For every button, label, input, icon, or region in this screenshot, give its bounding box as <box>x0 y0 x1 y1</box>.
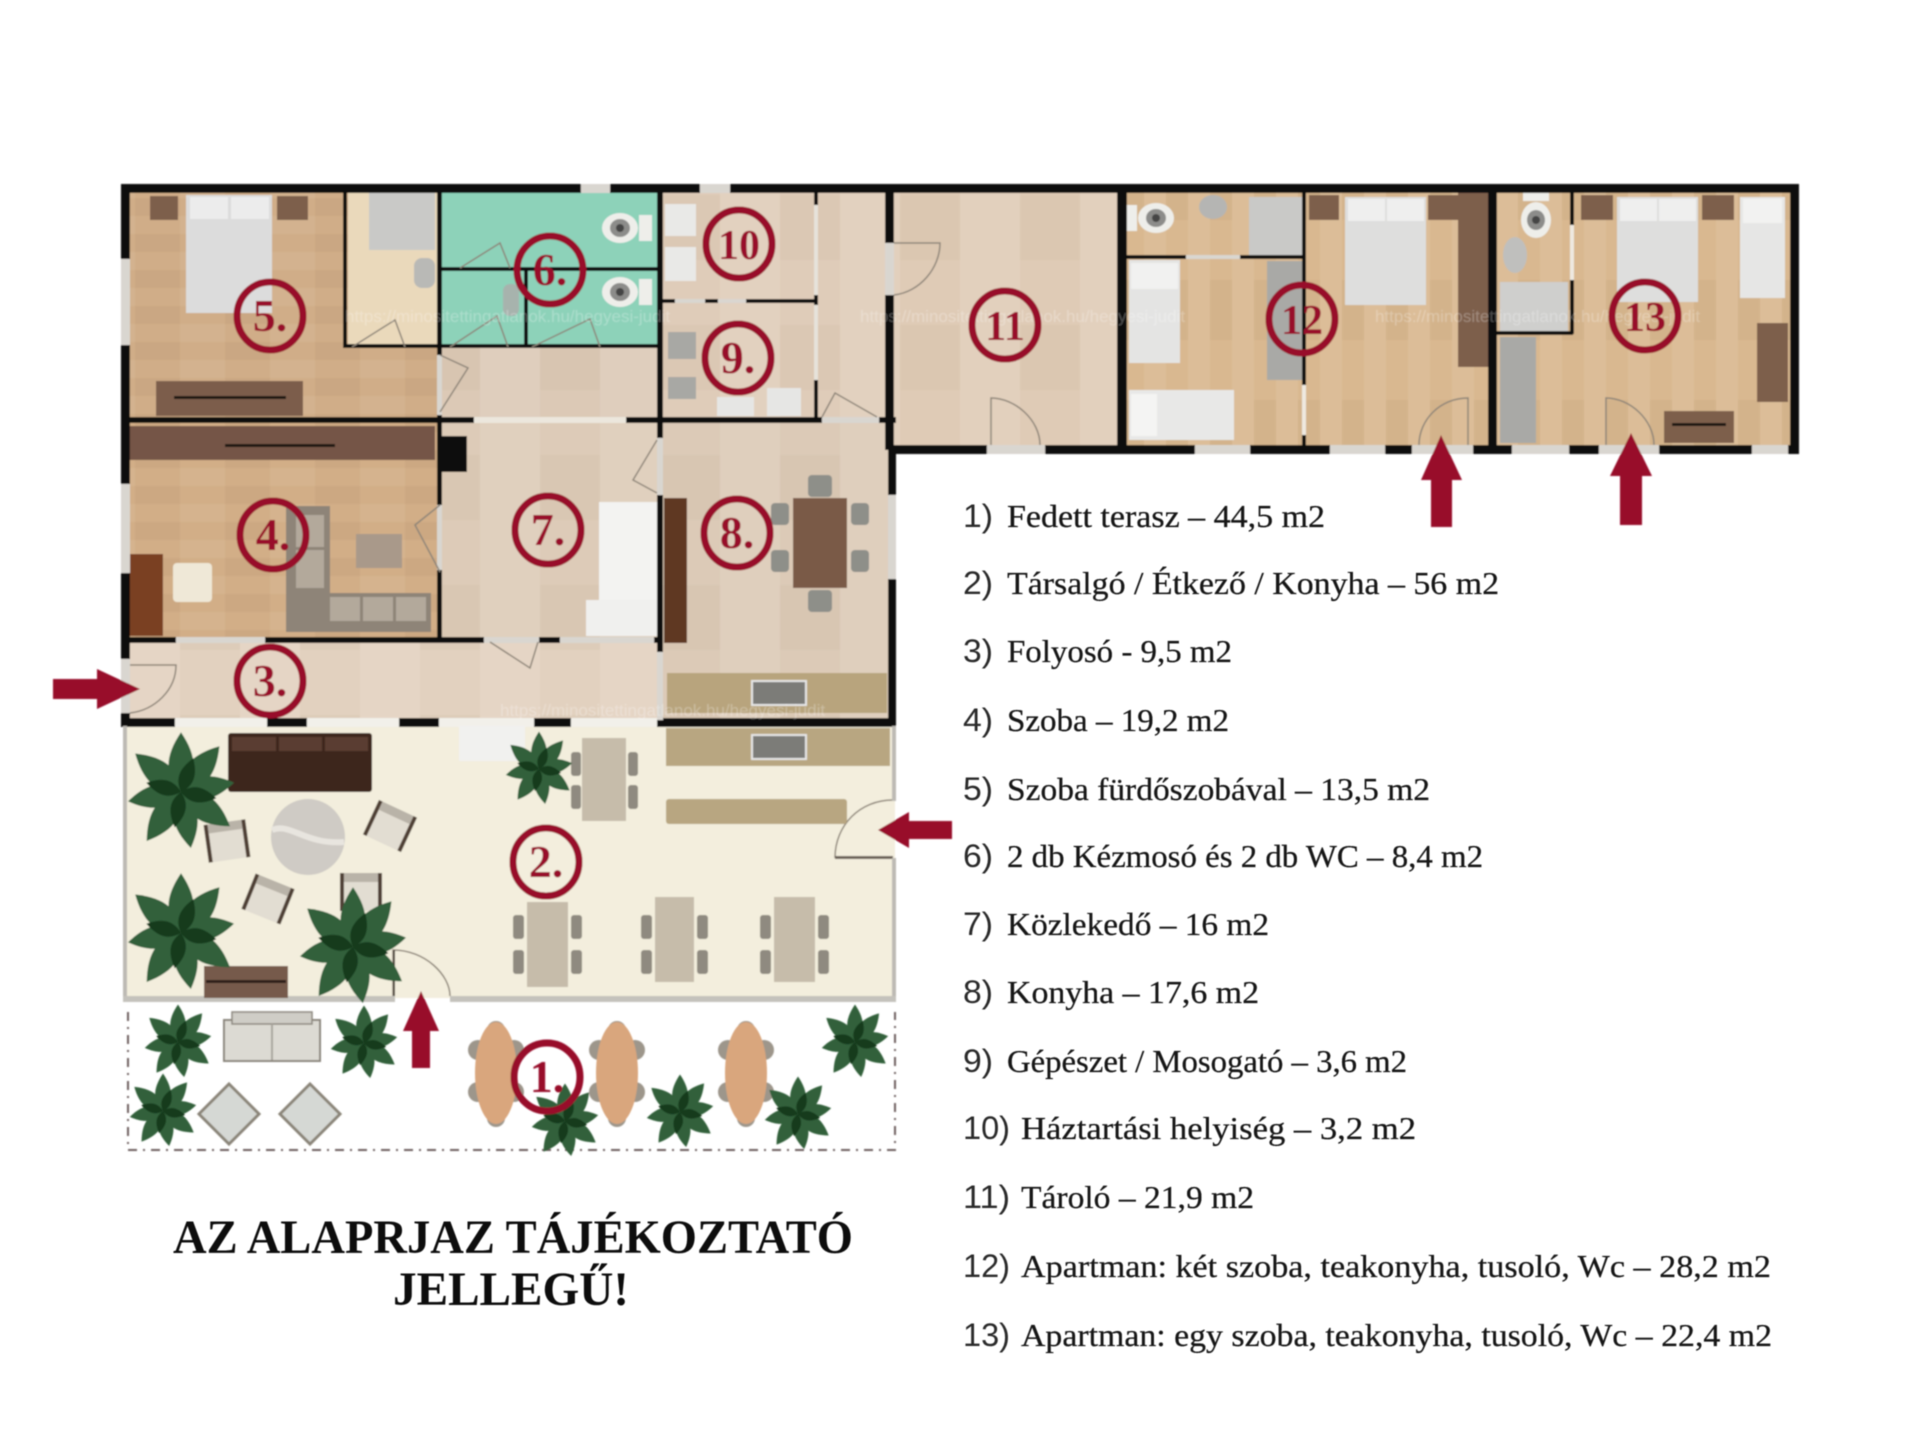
watermarks: https://minositettingatlanok.hu/hegyesi-judit <box>500 701 825 720</box>
title note: JELLEGŰ! <box>393 1262 629 1316</box>
marker 11: 11 <box>985 304 1025 350</box>
marker 2 <box>513 828 579 896</box>
room area list <box>963 498 1772 1353</box>
marker 8 <box>704 499 770 567</box>
panel: room 7 stairs <box>440 436 657 636</box>
room area list: 8) <box>963 974 993 1010</box>
marker 13: 13 <box>1624 295 1666 341</box>
marker 7: 7. <box>531 504 565 555</box>
arrow: apartment 13 entrance <box>1610 433 1652 525</box>
room area list: 4) <box>963 702 993 738</box>
panel: room 8 kitchen and dining <box>664 475 887 713</box>
room area list: 13) <box>963 1317 1010 1353</box>
marker 8: 8. <box>720 507 754 558</box>
room area list: Fedett terasz – 44,5 m2 <box>1007 498 1325 534</box>
watermarks <box>345 307 1700 720</box>
title note <box>173 1210 853 1316</box>
windows and door openings <box>121 184 1788 727</box>
room area list: 2) <box>963 565 993 601</box>
arrow: apartment 12 entrance <box>1421 435 1462 527</box>
panel: apartment 13 furniture <box>1500 188 1788 443</box>
panel: plants <box>126 732 890 1157</box>
marker 12 <box>1269 285 1335 353</box>
marker 4: 4. <box>256 509 290 560</box>
marker 6 <box>517 236 583 304</box>
marker 3: 3. <box>253 655 287 706</box>
room area list: Szoba – 19,2 m2 <box>1007 702 1229 738</box>
room area list: Közlekedő – 16 m2 <box>1007 906 1269 942</box>
room area list: Szoba fürdőszobával – 13,5 m2 <box>1007 771 1430 807</box>
room area list: 11) <box>963 1179 1010 1215</box>
marker 2: 2. <box>529 836 563 887</box>
watermarks: https://minositettingatlanok.hu/hegyesi-judit <box>345 307 670 326</box>
marker 10 <box>706 210 772 278</box>
marker 7 <box>515 496 581 564</box>
room area list: 1) <box>963 498 993 534</box>
panel: rooms 9 and 10 appliances <box>665 204 801 416</box>
room area list: 12) <box>963 1248 1010 1284</box>
arrow: lounge entrance right <box>878 812 952 848</box>
arrows <box>53 433 1652 1068</box>
panel: room 2 kitchen <box>666 728 890 824</box>
panel: room 4 furniture <box>130 426 435 636</box>
panel: terrace furniture <box>199 1012 774 1144</box>
floor plan <box>53 184 1799 1157</box>
watermarks: https://minositettingatlanok.hu/hegyesi-judit <box>860 307 1185 326</box>
room area list: Háztartási helyiség – 3,2 m2 <box>1021 1110 1416 1146</box>
panel: terrace outline <box>128 1012 895 1150</box>
marker 1: 1. <box>530 1051 564 1102</box>
panel: room 6 toilets <box>503 213 652 316</box>
room area list: Tároló – 21,9 m2 <box>1021 1179 1254 1215</box>
room area list: 5) <box>963 771 993 807</box>
marker 9: 9. <box>721 332 755 383</box>
title note: AZ ALAPRJAZ TÁJÉKOZTATÓ <box>173 1210 853 1264</box>
room area list: Gépészet / Mosogató – 3,6 m2 <box>1007 1043 1407 1079</box>
marker 5 <box>237 282 303 350</box>
room floors <box>126 192 1791 998</box>
room area list: 9) <box>963 1043 993 1079</box>
marker 4 <box>240 501 306 569</box>
marker 13 <box>1612 282 1678 350</box>
door swings <box>130 243 1654 996</box>
room area list: Társalgó / Étkező / Konyha – 56 m2 <box>1007 565 1499 601</box>
room area list: 6) <box>963 838 993 874</box>
panel: room 5 furniture <box>150 193 435 416</box>
panel: dining tables <box>513 738 829 987</box>
room area list: 2 db Kézmosó és 2 db WC – 8,4 m2 <box>1007 838 1483 874</box>
room area list: Konyha – 17,6 m2 <box>1007 974 1259 1010</box>
marker 3 <box>237 647 303 715</box>
walls <box>121 184 1799 727</box>
marker 12: 12 <box>1281 298 1323 344</box>
marker 5: 5. <box>253 290 287 341</box>
panel: lounge furniture <box>204 726 525 998</box>
panel: room 2 edges <box>123 726 896 1002</box>
room area list: Folyosó - 9,5 m2 <box>1007 633 1232 669</box>
panel: apartment 12 furniture <box>1124 193 1488 440</box>
arrow: terrace entrance <box>403 991 439 1068</box>
room area list: 10) <box>963 1110 1010 1146</box>
marker 9 <box>705 324 771 392</box>
watermarks: https://minositettingatlanok.hu/hegyesi-judit <box>1375 307 1700 326</box>
room number markers <box>237 210 1678 1111</box>
room area list: 3) <box>963 633 993 669</box>
marker 1 <box>514 1043 580 1111</box>
marker 6: 6. <box>533 244 567 295</box>
arrow: corridor entrance <box>53 669 140 709</box>
marker 10: 10 <box>718 223 760 269</box>
marker 11 <box>972 291 1038 359</box>
room area list: Apartman: egy szoba, teakonyha, tusoló, Wc – 22,4 m2 <box>1021 1317 1772 1353</box>
room area list: Apartman: két szoba, teakonyha, tusoló, Wc – 28,2 m2 <box>1021 1248 1771 1284</box>
room area list: 7) <box>963 906 993 942</box>
